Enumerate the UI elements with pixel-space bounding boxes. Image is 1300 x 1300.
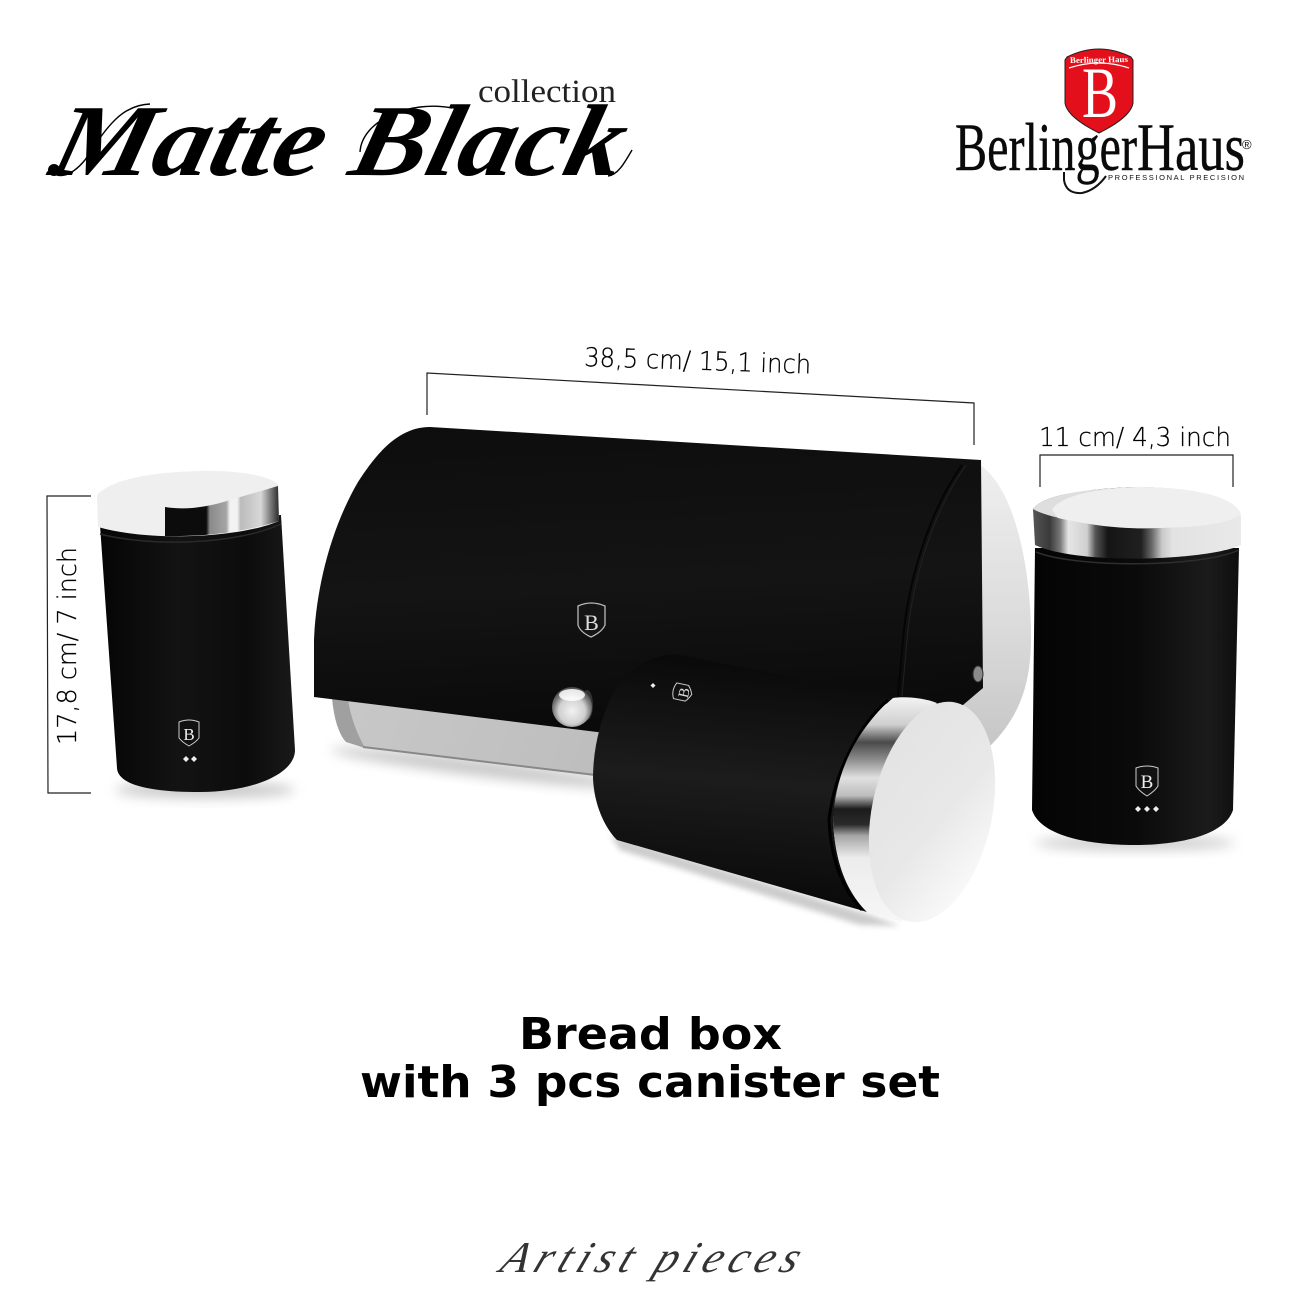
bread box grey right body	[950, 462, 1031, 748]
icon: lid emblem: B	[584, 610, 599, 635]
icon: chrome knob	[552, 687, 593, 727]
title: Matte Black collection	[39, 74, 639, 198]
product: left canister	[97, 471, 295, 798]
label: canister height: 17,8 cm/ 7 inch	[53, 547, 83, 745]
caption line one: Bread box	[519, 1009, 782, 1060]
label: canister width: 11 cm/ 4,3 inch	[1039, 423, 1231, 453]
icon: red shield	[1065, 49, 1133, 133]
left canister body	[100, 515, 295, 792]
left canister emblem: B	[183, 725, 195, 744]
right canister diamonds	[1135, 806, 1159, 812]
label: bread box width: 38,5 cm/ 15,1 inch	[584, 343, 812, 381]
collection label: collection	[478, 74, 616, 110]
right canister lid	[1033, 487, 1241, 559]
registered mark: ®	[1242, 137, 1252, 152]
right canister emblem: B	[1141, 772, 1153, 793]
left canister diamonds	[183, 756, 197, 762]
product: lying canister	[593, 654, 1014, 934]
left canister emblem	[179, 720, 199, 746]
dimension: width of bread box	[427, 343, 974, 445]
bread box black lid	[314, 427, 983, 736]
right canister emblem	[1136, 766, 1158, 796]
lying canister diamond	[650, 683, 656, 688]
lying canister emblem	[672, 683, 694, 702]
icon: lid emblem	[578, 603, 605, 637]
wordmark: Berlinger	[955, 109, 1137, 185]
bread box grey front panel	[333, 700, 640, 778]
tagline: PROFESSIONAL PRECISION	[1108, 173, 1244, 182]
icon: side rivet	[973, 666, 983, 682]
icon: red shield: Berlinger Haus	[1070, 54, 1129, 65]
lying canister chrome rim	[833, 697, 937, 922]
right canister body	[1032, 548, 1239, 845]
lying canister cap face	[850, 690, 1014, 934]
caption: product name	[360, 1009, 940, 1108]
lying canister body	[593, 654, 893, 912]
product: right canister	[1032, 487, 1241, 850]
dimension: canister width	[1039, 423, 1233, 487]
left canister lid	[97, 471, 279, 536]
logo: Berlinger Haus	[955, 49, 1252, 193]
wordmark: Haus	[1137, 109, 1245, 185]
caption line two: with 3 pcs canister set	[360, 1057, 940, 1108]
lying canister emblem: B	[676, 686, 694, 699]
signature: Artist pieces: Artist pieces	[491, 1233, 810, 1282]
product: bread box	[314, 427, 1031, 794]
dimension: canister height	[47, 496, 91, 793]
icon: red shield: B	[1082, 53, 1118, 133]
Matte Black script heading: Matte Black	[39, 85, 639, 198]
